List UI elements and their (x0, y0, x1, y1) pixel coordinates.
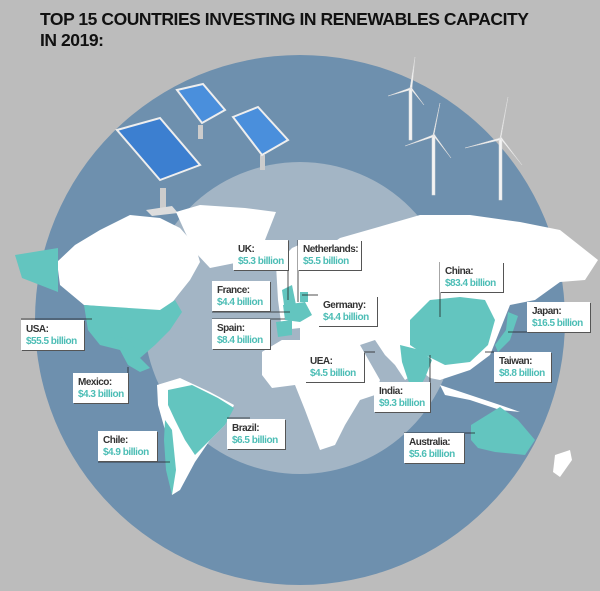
label: UEA: $4.5 billion (310, 368, 356, 379)
label: UK (233, 240, 288, 270)
label: Japan: $16.5 billion (532, 318, 583, 329)
label: Taiwan: Taiwan: (499, 356, 532, 367)
icon: solar panels (117, 84, 288, 216)
label: France: $4.4 billion (217, 297, 263, 308)
label: Mexico (73, 373, 128, 403)
label: Brazil: Brazil: (232, 423, 259, 434)
label: Japan (527, 302, 590, 332)
label: USA: $55.5 billion (26, 336, 77, 347)
label: Mexico: $4.3 billion (78, 389, 124, 400)
label: Taiwan (494, 352, 551, 382)
label: UEA (305, 352, 364, 382)
label: Chile: Chile: (103, 435, 128, 446)
label: Germany (318, 296, 377, 326)
label: Brazil (227, 419, 285, 449)
label: Spain (212, 319, 270, 349)
label: UK: $5.3 billion (238, 256, 284, 267)
label: Spain: $8.4 billion (217, 335, 263, 346)
title: TOP 15 COUNTRIES INVESTING IN RENEWABLES CAPACITY (40, 9, 528, 29)
label: USA (21, 320, 84, 350)
inner circle (144, 162, 456, 474)
outer circle (35, 55, 565, 585)
label: Netherlands: Netherlands: (303, 244, 358, 255)
label: Chile: $4.9 billion (103, 447, 149, 458)
label: France (212, 281, 270, 311)
label: Germany: Germany: (323, 300, 366, 311)
label: USA: USA: (26, 324, 48, 335)
leader lines (21, 240, 590, 462)
label: India (374, 382, 430, 412)
label: Australia: Australia: (409, 437, 450, 448)
label: Spain: Spain: (217, 323, 245, 334)
label: Australia: $5.6 billion (409, 449, 455, 460)
label: Taiwan: $8.8 billion (499, 368, 545, 379)
label: Chile (98, 431, 157, 461)
label: China: China: (445, 266, 473, 277)
label: Germany: $4.4 billion (323, 312, 369, 323)
label: Australia (404, 433, 464, 463)
label: Netherlands: $5.5 billion (303, 256, 349, 267)
label: India: $9.3 billion (379, 398, 425, 409)
label: China (440, 262, 503, 292)
title: IN 2019: (40, 30, 104, 50)
label: France: France: (217, 285, 250, 296)
title (40, 9, 529, 50)
label: Japan: Japan: (532, 306, 561, 317)
label: China: $83.4 billion (445, 278, 496, 289)
highlighted countries (15, 248, 535, 495)
label: Brazil: $6.5 billion (232, 435, 278, 446)
world map (57, 205, 598, 495)
label: Mexico: Mexico: (78, 377, 112, 388)
label: UK: UK: (238, 244, 254, 255)
label: India: India: (379, 386, 403, 397)
label: Netherlands (298, 240, 361, 270)
icon: wind turbines (388, 57, 522, 200)
label: UEA: UEA: (310, 356, 332, 367)
